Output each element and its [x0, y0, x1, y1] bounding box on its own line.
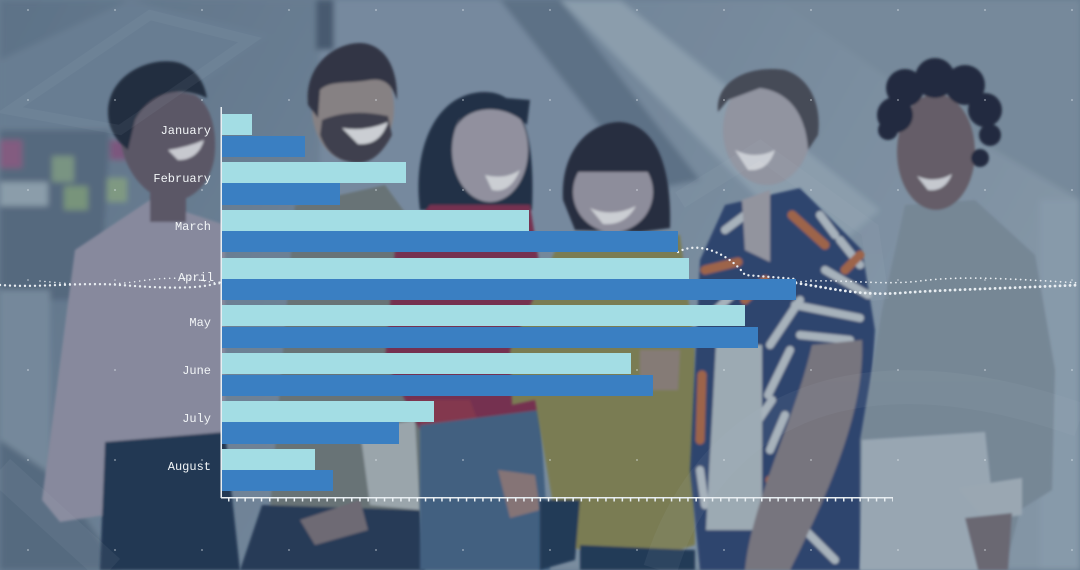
July bars: [222, 401, 434, 444]
data wave: dotted line across the page: [0, 248, 1080, 294]
month labels: July: [182, 412, 211, 426]
month labels: February: [153, 172, 211, 186]
person 5: man in patterned shirt: [690, 69, 875, 570]
January bars: [222, 114, 305, 157]
person 6: woman in grey jacket: [860, 58, 1055, 570]
person 4: woman in yellow top: [510, 122, 695, 570]
person 3: woman in red top: [385, 92, 550, 570]
August bars: [222, 449, 333, 491]
month labels: [153, 124, 214, 474]
x axis with ticks: [221, 497, 893, 500]
March bars: [222, 210, 678, 252]
month labels: March: [175, 220, 211, 234]
month labels: June: [182, 364, 211, 378]
person 1: woman in pale shirt: [42, 61, 240, 570]
month labels: April: [178, 271, 214, 285]
May bars: [222, 305, 758, 348]
person 2: bearded man: [240, 43, 425, 570]
month labels: May: [189, 316, 211, 330]
February bars: [222, 162, 406, 205]
y axis: [220, 107, 222, 498]
bar chart: monthly values January to August: [220, 107, 893, 500]
month labels: August: [168, 460, 211, 474]
June bars: [222, 353, 653, 396]
April bars: [222, 258, 796, 300]
shirt leaf pattern: [700, 215, 868, 560]
month labels: January: [161, 124, 211, 138]
